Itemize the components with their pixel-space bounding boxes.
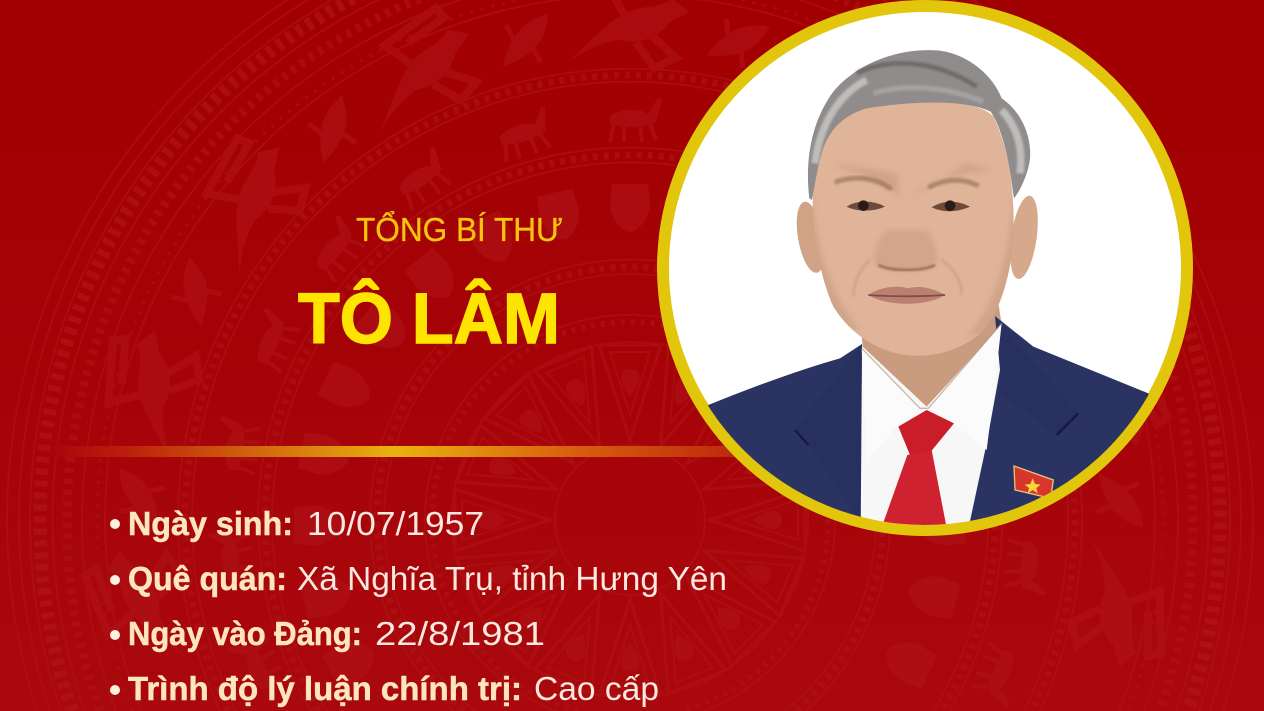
item: home town — [110, 560, 727, 597]
item: party entry date — [110, 615, 545, 652]
portrait frame — [663, 6, 1187, 530]
neck — [862, 304, 1001, 406]
heading: position: TỔNG BÍ THƯ — [356, 211, 563, 249]
item: home town: Xã Nghĩa Trụ, tỉnh Hưng Yên — [297, 560, 727, 597]
item: birth date: Ngày sinh: — [128, 505, 293, 542]
item: birth date: 10/07/1957 — [307, 505, 484, 542]
lapel pin — [1014, 466, 1053, 498]
hair highlights — [815, 63, 1021, 173]
jacket left — [708, 344, 862, 517]
hair — [808, 50, 1030, 200]
ear left — [796, 202, 821, 273]
portrait — [708, 50, 1149, 525]
face — [813, 99, 1014, 356]
tie — [884, 450, 946, 525]
gold divider — [55, 446, 735, 457]
jacket right — [970, 316, 1149, 521]
item: political theory level: Cao cấp — [534, 670, 659, 707]
nose — [875, 230, 936, 268]
ear right — [1010, 196, 1038, 279]
item: party entry date: Ngày vào Đảng: — [128, 615, 362, 652]
shirt — [862, 516, 970, 525]
eyes — [847, 202, 970, 211]
biography list — [110, 505, 727, 707]
item: birth date — [110, 505, 484, 542]
brows — [837, 178, 977, 188]
item: home town: Quê quán: — [128, 560, 287, 597]
face shading — [807, 163, 1020, 337]
lips — [868, 287, 945, 304]
item: party entry date: 22/8/1981 — [375, 615, 545, 652]
shirt collar — [862, 323, 1002, 460]
item: political theory level: Trình độ lý luận chính trị: — [128, 670, 522, 707]
heading: name: TÔ LÂM — [298, 279, 560, 359]
